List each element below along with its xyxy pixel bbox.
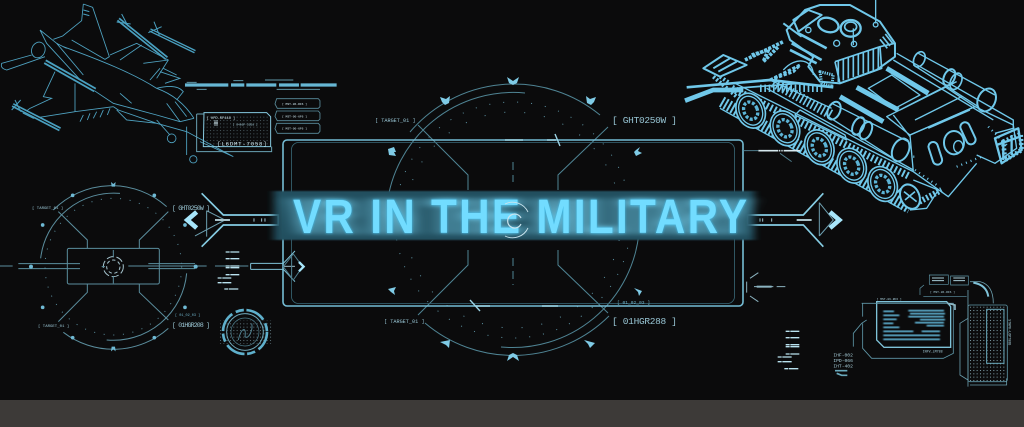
left reticle labels: [ GHT0250W ] bbox=[172, 205, 210, 212]
small chevron bbox=[299, 262, 304, 271]
jet hud panel: [L6DMT-7058] bbox=[217, 140, 267, 147]
hud labels: [ MST-06-RF6 ] bbox=[877, 297, 902, 301]
chevron left bbox=[187, 212, 197, 228]
hud labels: IPD-066 bbox=[833, 358, 853, 364]
tank turret bbox=[783, 0, 895, 87]
left reticle markers bbox=[29, 182, 198, 351]
left reticle labels: [ TARGET_01 ] bbox=[32, 206, 63, 211]
jet data bar bbox=[185, 80, 337, 89]
fighter jet bbox=[1, 4, 233, 163]
jet status tags: [ MST-06-6F6 ] bbox=[282, 114, 307, 118]
hud labels bbox=[833, 290, 1011, 369]
jet hud panel: [ HPD-RF448 ] bbox=[207, 116, 235, 121]
reticle labels: [ GHT0250W ] bbox=[612, 115, 677, 126]
small data ticks bbox=[218, 252, 239, 289]
left reticle labels: [ TARGET_01 ] bbox=[38, 324, 69, 329]
tank callout bbox=[743, 151, 800, 162]
tank hull bbox=[840, 50, 1022, 197]
central reticle bbox=[387, 77, 642, 361]
right small target bbox=[747, 273, 785, 302]
title band: VR IN THE MILITARY bbox=[293, 189, 747, 244]
left reticle labels: [ 01HGR208 ] bbox=[172, 322, 210, 329]
jet hud panel: [ 0486F-5058 ] bbox=[233, 122, 258, 126]
chevron right bbox=[830, 212, 839, 228]
bottom bar bbox=[0, 400, 1024, 427]
central frame bbox=[283, 134, 743, 311]
jet status tags: [ MST-06-RF6 ] bbox=[282, 102, 307, 106]
left reticle labels: [ 01_02_03 ] bbox=[175, 313, 200, 318]
reticle labels bbox=[375, 115, 677, 327]
hud labels: IHT-402 bbox=[833, 363, 853, 369]
hud labels: STHPK-LOPT08B bbox=[1007, 319, 1011, 345]
hud labels: [ MST-06-RF6 ] bbox=[930, 290, 955, 294]
left connector bbox=[187, 193, 278, 247]
title: VR IN THE MILITARY bbox=[293, 189, 747, 244]
radar dial bbox=[219, 310, 272, 354]
title band: VR IN THE MILITARY bbox=[293, 189, 747, 244]
reticle arrow markers bbox=[388, 77, 642, 361]
jet status tags: [ MST-06-6F6 ] bbox=[282, 127, 307, 131]
jet hud panel bbox=[197, 99, 320, 152]
hud side panel bbox=[960, 282, 1007, 387]
right connector bbox=[747, 193, 839, 247]
center crosshair bbox=[505, 202, 528, 238]
hud labels: IHF-002 bbox=[833, 353, 853, 359]
reticle labels: [ TARGET_01 ] bbox=[384, 319, 424, 325]
tank tracks and wheels bbox=[720, 83, 942, 212]
tank bbox=[685, 0, 1022, 212]
left reticle labels bbox=[32, 205, 210, 329]
reticle labels: [ 01HGR288 ] bbox=[612, 316, 677, 327]
hud small boxes bbox=[920, 275, 968, 297]
jet airframe bbox=[1, 4, 233, 163]
tank fenders and near drum bbox=[703, 42, 913, 170]
hud labels: INFV_LM788 bbox=[923, 349, 943, 353]
jet status tags bbox=[275, 99, 320, 133]
left reticle bbox=[0, 182, 248, 351]
hud screen bbox=[853, 302, 955, 358]
right data ticks bbox=[778, 331, 799, 369]
tank gun bbox=[685, 65, 833, 101]
reticle labels: [ 01_02_03 ] bbox=[617, 300, 650, 306]
reticle labels: [ TARGET_01 ] bbox=[375, 118, 415, 124]
small left connector bbox=[251, 251, 304, 282]
hud schematic bbox=[833, 275, 1011, 387]
jet missiles bbox=[12, 10, 195, 129]
